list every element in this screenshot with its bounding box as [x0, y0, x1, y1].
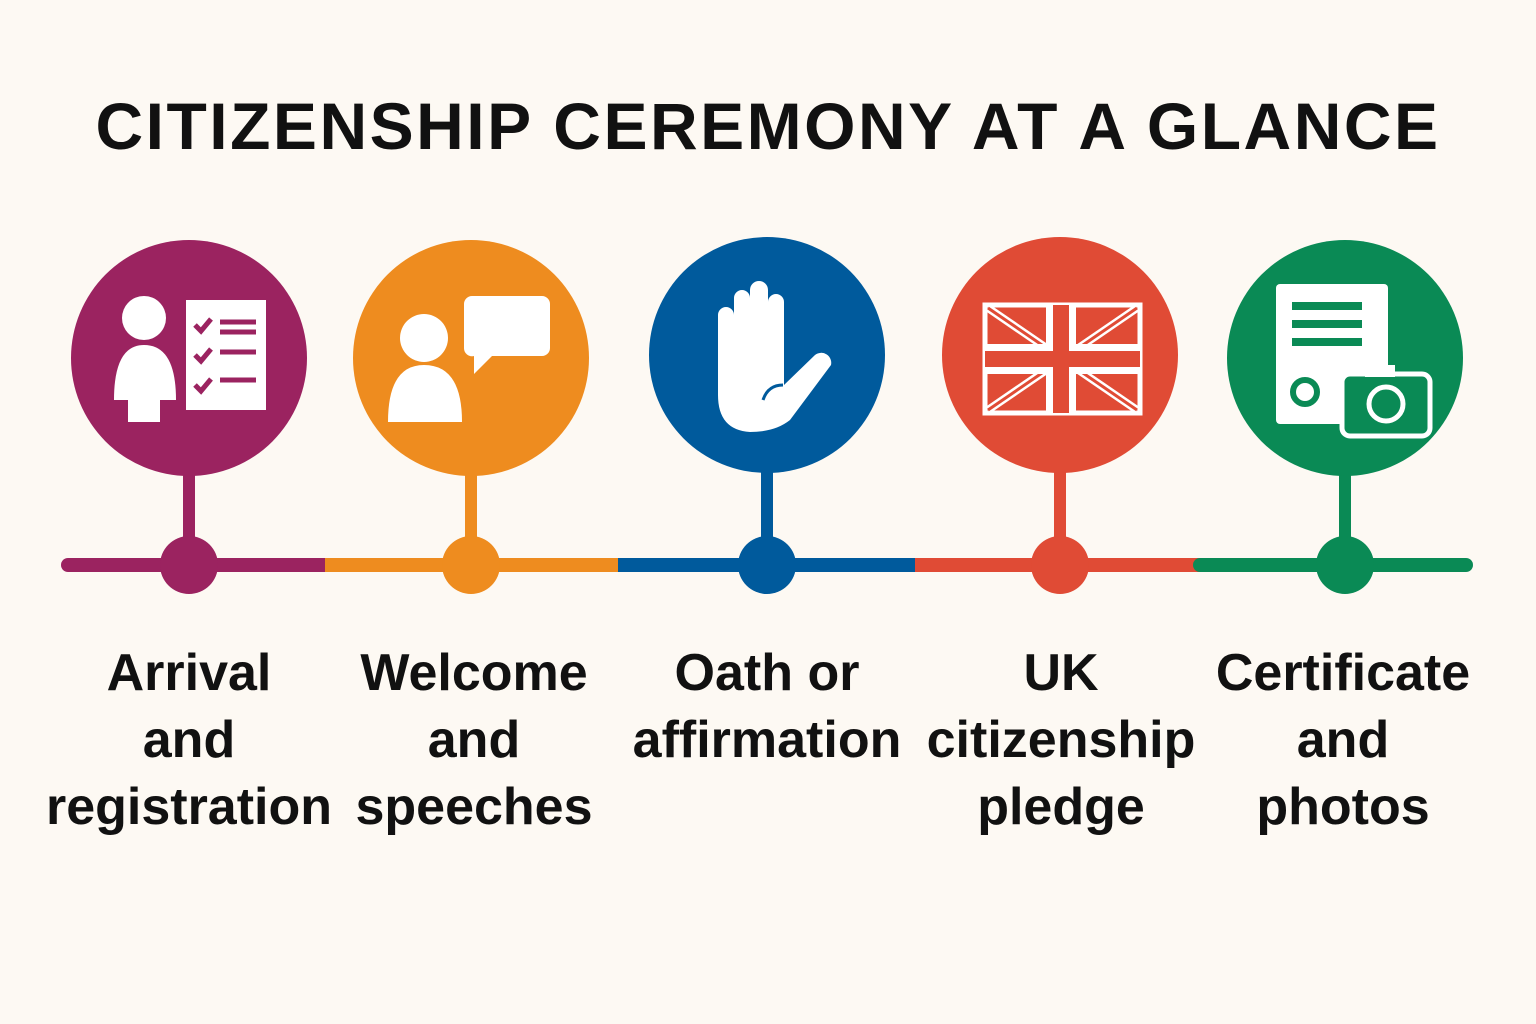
label 2: speeches [355, 778, 593, 836]
label 3: Oath or [675, 644, 859, 702]
label 3 [633, 644, 901, 769]
step 4 icon: union flag [942, 237, 1178, 594]
label 2: and [428, 711, 520, 769]
step 1 icon: arrival and registration [71, 240, 307, 594]
label 4: citizenship [927, 711, 1195, 769]
label 1 [46, 644, 332, 836]
timeline line [68, 558, 1466, 572]
step 5 icon: certificate and camera [1227, 240, 1463, 594]
label 4 [927, 644, 1195, 836]
label 1: registration [46, 778, 332, 836]
label 3: affirmation [633, 711, 901, 769]
label 5: photos [1256, 778, 1430, 836]
label 2: Welcome [360, 644, 588, 702]
label 1: and [143, 711, 235, 769]
label 4: UK [1023, 644, 1099, 702]
label 4: pledge [977, 778, 1145, 836]
label 1: Arrival [107, 644, 271, 702]
step 2 icon: welcome and speeches [353, 240, 589, 594]
title: CITIZENSHIP CEREMONY AT A GLANCE [95, 89, 1441, 163]
label 5 [1216, 644, 1470, 836]
label 2 [355, 644, 593, 836]
label 5: Certificate [1216, 644, 1470, 702]
label 5: and [1297, 711, 1389, 769]
step 3 icon: oath hand [649, 237, 885, 594]
